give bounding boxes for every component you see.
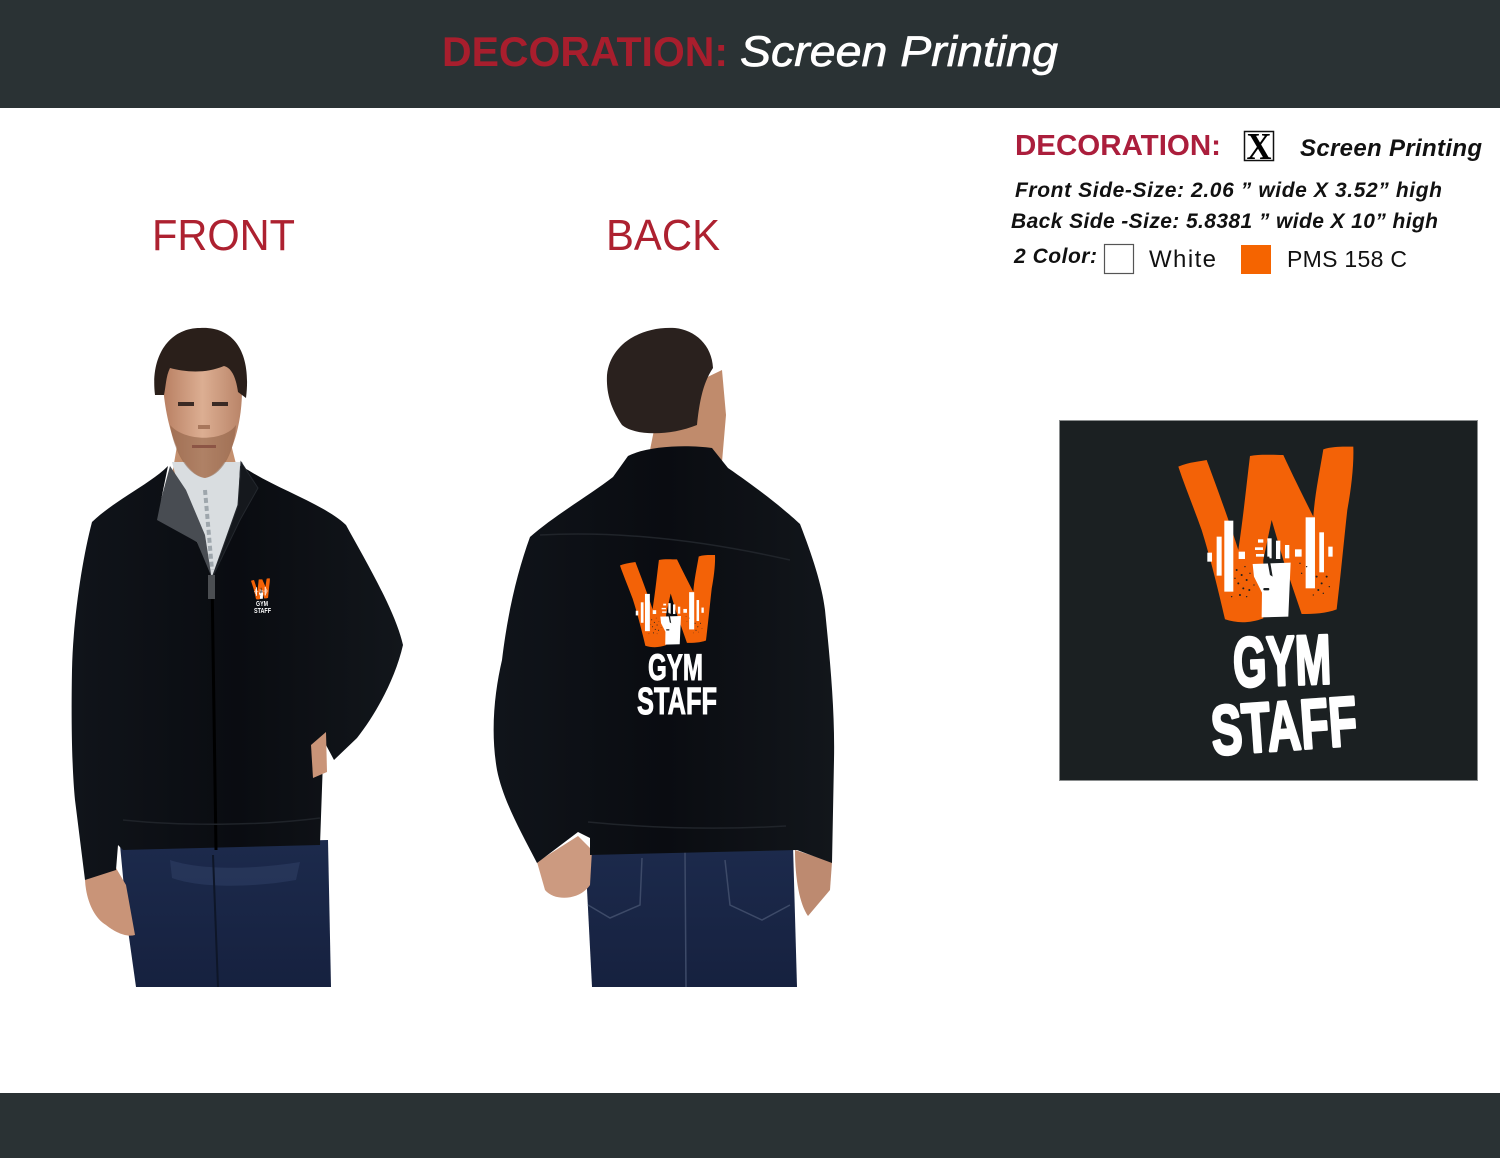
spec heading: DECORATION: bbox=[1015, 130, 1221, 162]
jacket body bbox=[494, 446, 834, 863]
heading: front: FRONT bbox=[152, 211, 295, 260]
face bbox=[163, 350, 242, 478]
zipper pull bbox=[208, 575, 215, 599]
logo panel bbox=[1060, 420, 1478, 780]
decoration spec block bbox=[1011, 126, 1482, 274]
logo mark: W with dumbbell bbox=[1178, 447, 1353, 622]
swatch: orange bbox=[1241, 245, 1271, 274]
chest logo text: staff: STAFF bbox=[254, 608, 272, 615]
title: Screen Printing bbox=[740, 28, 1058, 76]
decoration method: Screen Printing bbox=[1300, 135, 1482, 162]
title bbox=[442, 28, 1058, 76]
back logo bbox=[620, 555, 717, 723]
shirt button placket bbox=[205, 490, 212, 570]
colour label: 2 Color: bbox=[1013, 245, 1097, 268]
title: DECORATION: bbox=[442, 28, 728, 75]
left hand bbox=[85, 868, 135, 936]
logo text: staff: STAFF bbox=[1209, 682, 1360, 770]
inner collar bbox=[155, 466, 212, 580]
zipper bbox=[212, 578, 216, 850]
back logo text: gym: GYM bbox=[648, 647, 703, 688]
nose shadow bbox=[198, 425, 210, 429]
neck bbox=[172, 440, 240, 520]
photo: back model bbox=[494, 328, 834, 987]
hair bbox=[607, 328, 713, 433]
back logo text: staff: STAFF bbox=[637, 681, 717, 723]
hair bbox=[154, 328, 247, 398]
jeans bbox=[585, 845, 797, 987]
header band bbox=[0, 0, 1500, 108]
front chest logo bbox=[251, 578, 272, 615]
eyes bbox=[178, 402, 228, 406]
back yoke seam bbox=[540, 534, 790, 560]
footer band bbox=[0, 1093, 1500, 1158]
hem rib bbox=[123, 818, 320, 824]
label: pms: PMS 158 C bbox=[1287, 246, 1407, 272]
swatch: white bbox=[1104, 244, 1134, 274]
photo: front model bbox=[72, 328, 403, 987]
left hand bbox=[537, 836, 592, 898]
hem rib seam bbox=[588, 822, 786, 828]
pockets bbox=[588, 852, 790, 987]
chest logo text: gym: GYM bbox=[256, 601, 268, 608]
label: white: White bbox=[1149, 246, 1216, 273]
jeans bbox=[120, 840, 331, 987]
pocket hand bbox=[311, 732, 327, 778]
shirt bbox=[172, 462, 243, 578]
jacket collar right bbox=[212, 462, 258, 578]
logo text: gym: GYM bbox=[1232, 620, 1332, 702]
front size: Front Side-Size: 2.06 ” wide X 3.52” high bbox=[1015, 179, 1442, 202]
mouth bbox=[192, 445, 216, 448]
neck and ear bbox=[650, 370, 726, 462]
checkbox: X bbox=[1246, 126, 1272, 168]
right hand bbox=[795, 850, 832, 916]
stubble bbox=[170, 425, 236, 478]
back size: Back Side -Size: 5.8381 ” wide X 10” high bbox=[1011, 210, 1438, 233]
fly seam bbox=[213, 855, 218, 987]
heading: back: BACK bbox=[606, 211, 720, 260]
jeans highlight bbox=[170, 860, 300, 886]
jacket body bbox=[72, 466, 403, 880]
